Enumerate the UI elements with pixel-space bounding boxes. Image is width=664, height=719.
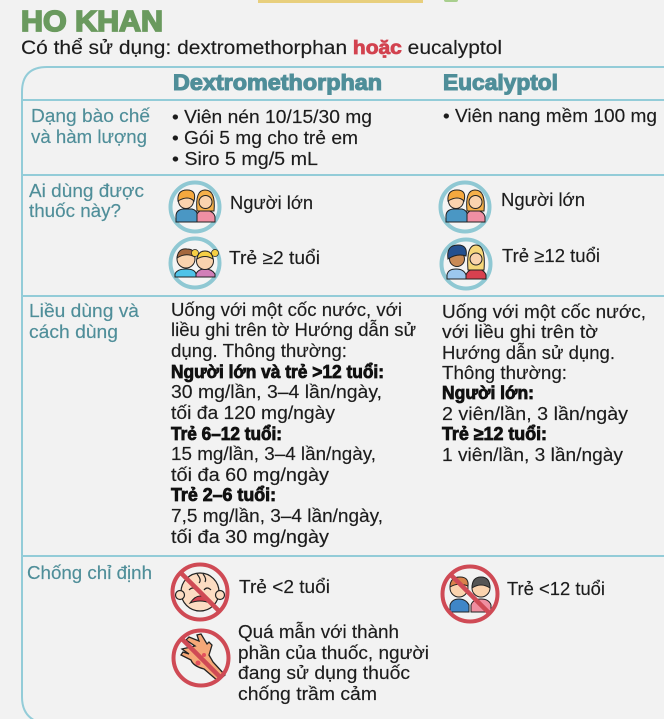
- dextromethorphan dosage text: 15 mg/lần, 3–4 lần/ngày,: [171, 444, 376, 464]
- dextromethorphan dosage forms: • Viên nén 10/15/30 mg: [172, 107, 372, 127]
- dextromethorphan dosage text: [171, 300, 416, 547]
- column heading: Dextromethorphan: Dextromethorphan: [173, 70, 382, 95]
- title: HO KHAN: [21, 6, 163, 38]
- dextromethorphan dosage forms: • Siro 5 mg/5 mL: [172, 149, 318, 169]
- dextromethorphan dosage text: tối đa 120 mg/ngày: [171, 403, 335, 423]
- row label: dosage and usage: [29, 301, 140, 342]
- icon: teenagers: [442, 240, 490, 288]
- row label: who can use: thuốc này?: [29, 201, 121, 221]
- text: hypersensitivity: phần của thuốc, người: [238, 643, 429, 663]
- text: under 2 years: Trẻ <2 tuổi: [239, 577, 330, 597]
- row label: dosage and usage: Liều dùng và: [29, 301, 140, 321]
- text: hypersensitivity: Quá mẫn với thành: [238, 621, 399, 642]
- text: hypersensitivity: đang sử dụng thuốc: [238, 663, 410, 683]
- eucalyptol dosage form: • Viên nang mềm 100 mg: [443, 106, 657, 126]
- icon: no baby: [172, 564, 228, 620]
- eucalyptol dosage text: [442, 302, 646, 465]
- icon: no allergic hand: [174, 630, 228, 686]
- eucalyptol dosage text: Thông thường:: [442, 363, 567, 383]
- row label: dosage and usage: cách dùng: [29, 322, 118, 342]
- children label: Trẻ ≥2 tuổi: [229, 248, 320, 268]
- eucalyptol dosage text: Trẻ ≥12 tuổi:: [442, 424, 547, 444]
- icon: adults: [170, 182, 220, 232]
- eucalyptol dosage text: Hướng dẫn sử dụng.: [442, 342, 615, 363]
- adults label (eucalyptol): Người lớn: [501, 190, 585, 210]
- teenagers label: Trẻ ≥12 tuổi: [502, 246, 600, 266]
- eucalyptol dosage text: 2 viên/lần, 3 lần/ngày: [442, 404, 628, 424]
- adults label: Người lớn: [230, 193, 313, 213]
- dextromethorphan dosage text: Trẻ 2–6 tuổi:: [171, 485, 276, 505]
- dextromethorphan dosage text: Người lớn và trẻ >12 tuổi:: [171, 362, 384, 382]
- dextromethorphan dosage text: 30 mg/lần, 3–4 lần/ngày,: [171, 382, 382, 402]
- subtitle: Có thể sử dụng: dextromethorphan hoặc eucalyptol: [21, 38, 502, 59]
- row label: contraindications: Chống chỉ định: [27, 563, 152, 583]
- eucalyptol dosage text: Người lớn:: [442, 383, 534, 403]
- dextromethorphan dosage text: 7,5 mg/lần, 3–4 lần/ngày,: [171, 506, 383, 526]
- row label: dosage form: và hàm lượng: [31, 127, 147, 147]
- row label: dosage form: [31, 106, 150, 147]
- icon: children: [170, 238, 220, 288]
- column heading: Eucalyptol: Eucalyptol: [443, 70, 558, 95]
- dextromethorphan dosage text: liều ghi trên tờ Hướng dẫn sử: [171, 319, 416, 340]
- eucalyptol dosage text: 1 viên/lần, 3 lần/ngày: [442, 445, 623, 465]
- icon: no children: [442, 566, 498, 622]
- eucalyptol dosage text: với liều ghi trên tờ: [442, 322, 598, 342]
- text: under 12 years: Trẻ <12 tuổi: [507, 579, 605, 599]
- dextromethorphan dosage text: Trẻ 6–12 tuổi:: [171, 424, 282, 444]
- row label: who can use: Ai dùng được: [29, 181, 144, 201]
- eucalyptol dosage text: Uống với một cốc nước,: [442, 302, 646, 322]
- dextromethorphan dosage forms: • Gói 5 mg cho trẻ em: [172, 128, 358, 148]
- dextromethorphan dosage forms: [172, 107, 372, 169]
- dextromethorphan dosage text: tối đa 30 mg/ngày: [171, 527, 329, 547]
- text: hypersensitivity: chống trầm cảm: [238, 684, 377, 704]
- dextromethorphan dosage text: Uống với một cốc nước, với: [171, 300, 402, 320]
- text: hypersensitivity: [238, 621, 429, 704]
- icon: adults (eucalyptol): [440, 182, 490, 232]
- row label: dosage form: Dạng bào chế: [31, 106, 150, 126]
- dextromethorphan dosage text: dụng. Thông thường:: [171, 341, 347, 361]
- row label: who can use: [29, 181, 144, 221]
- dextromethorphan dosage text: tối đa 60 mg/ngày: [171, 465, 329, 485]
